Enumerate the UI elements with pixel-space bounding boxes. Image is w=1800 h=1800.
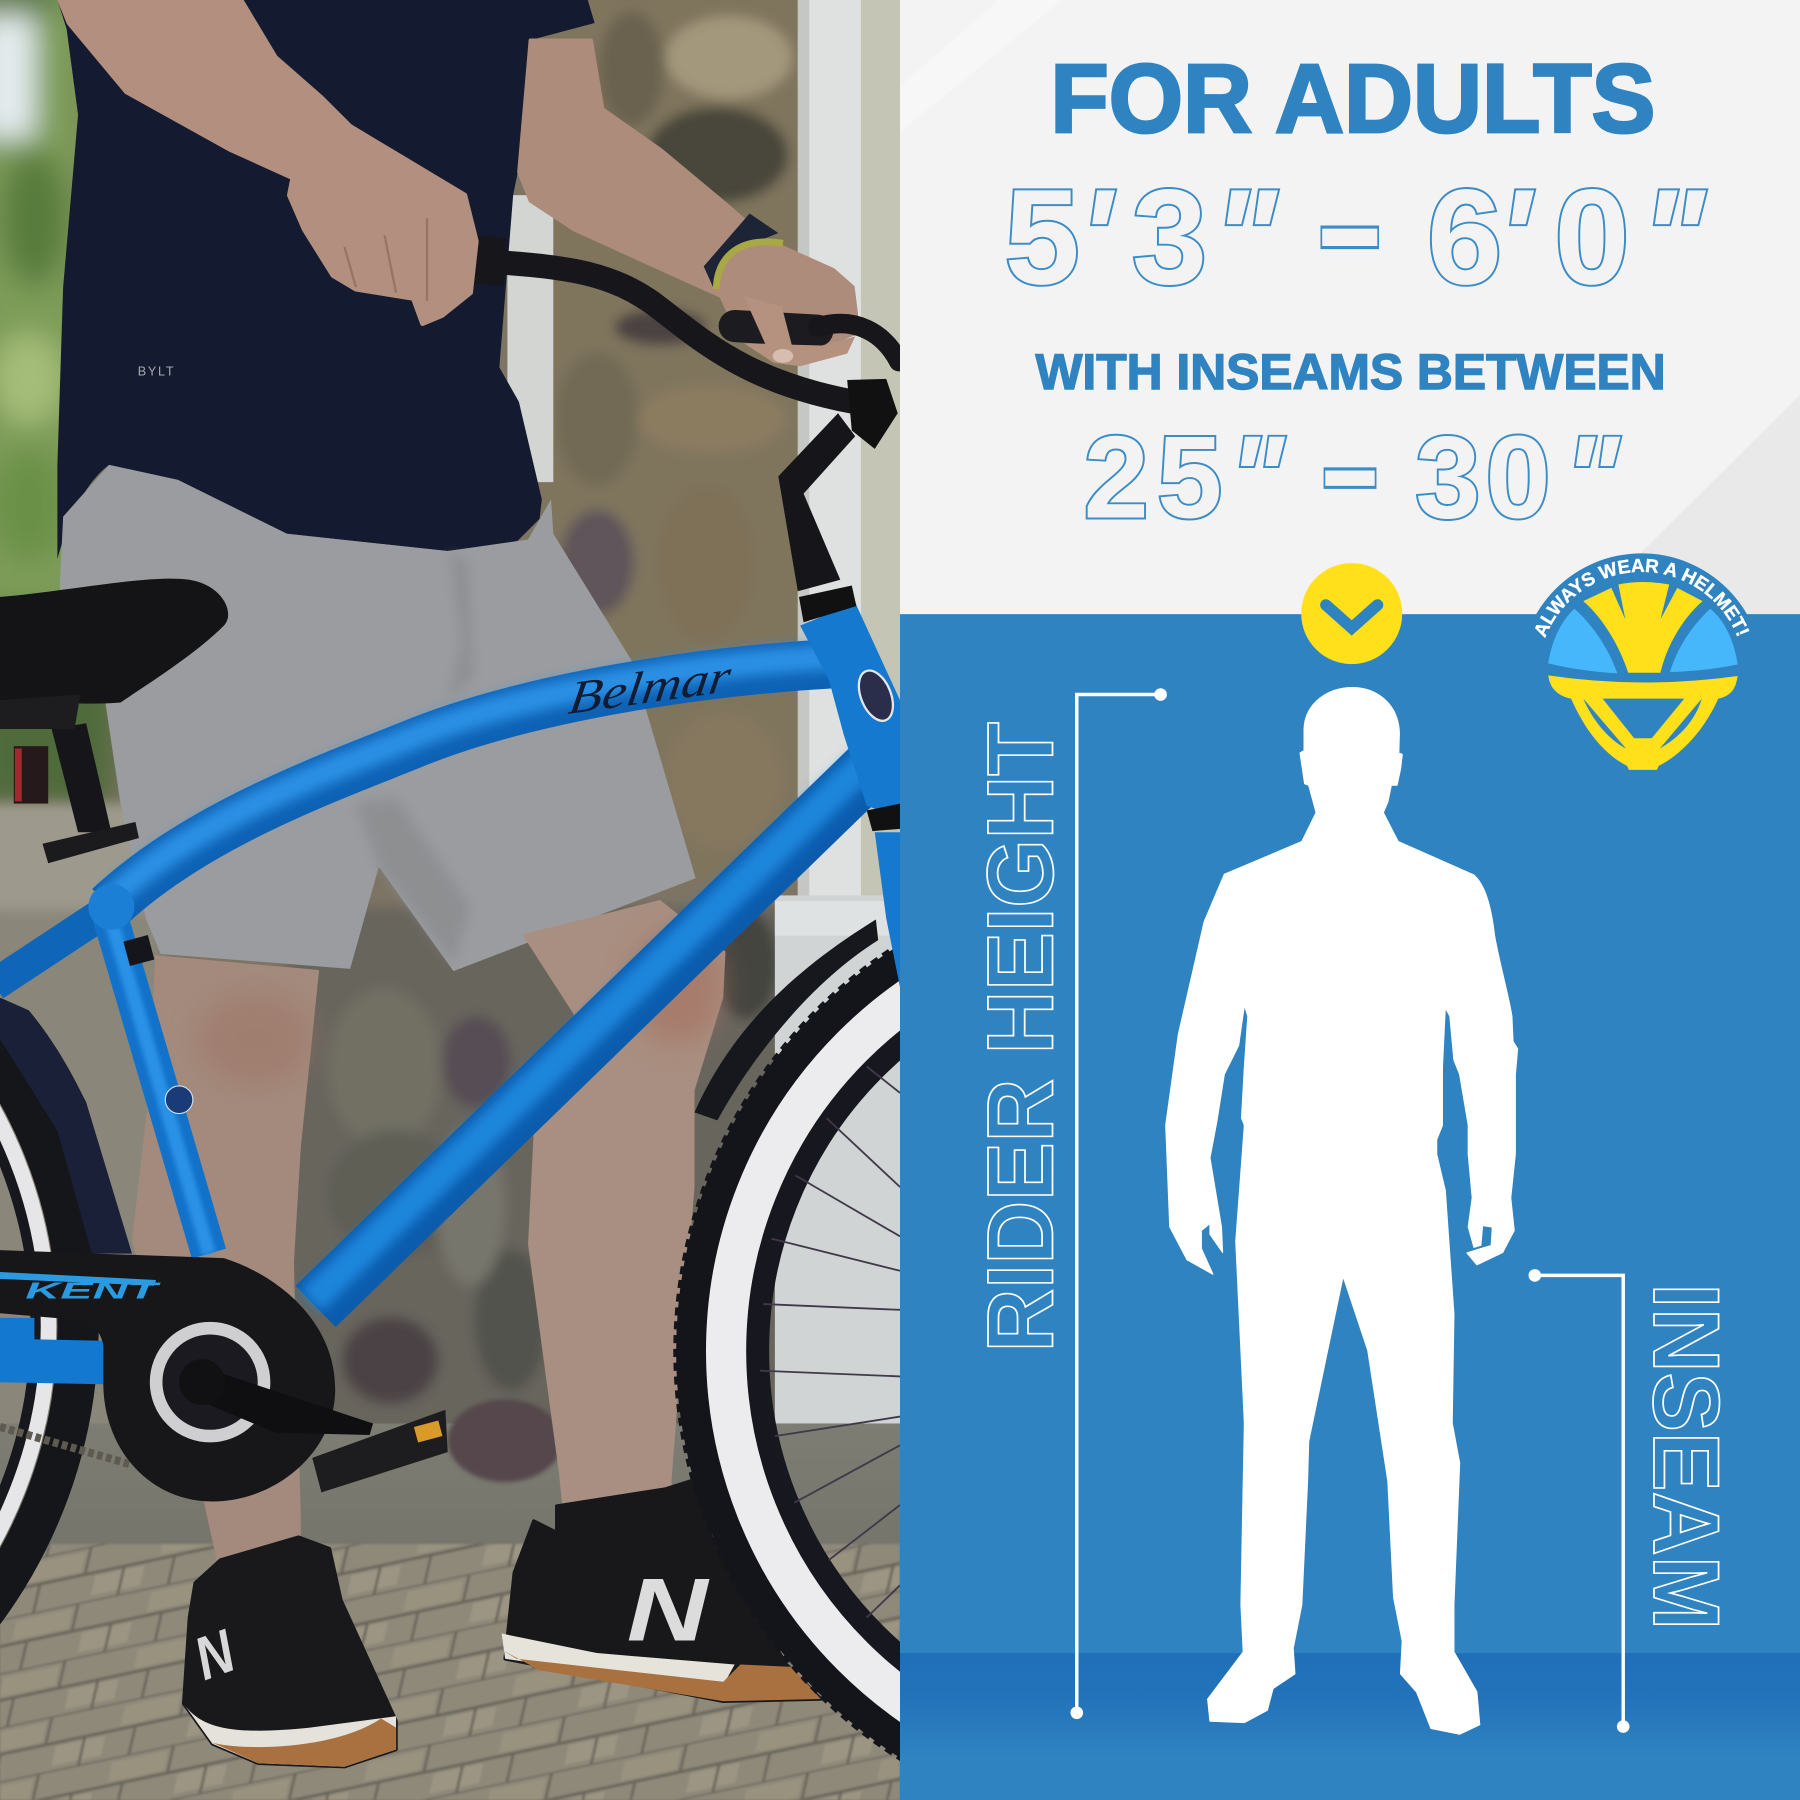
person silhouette — [1166, 688, 1518, 1734]
photo: handlebar — [473, 259, 899, 404]
photo: blue bike frame — [0, 585, 900, 1363]
photo: far sneaker — [502, 1480, 821, 1701]
height range outlined — [1004, 107, 1706, 337]
inseam range outlined: 0 — [1485, 412, 1551, 543]
photo: near sneaker: N — [185, 1616, 245, 1693]
helmet: curved slogan: ALWAYS WEAR A HELMET! — [1535, 558, 1750, 638]
photo: near arm and fist — [60, 0, 476, 324]
height range outlined: ' — [1079, 161, 1115, 313]
frame: head tube — [800, 603, 900, 817]
photo: handlebar stem — [778, 413, 855, 591]
photo: stem clamp — [847, 379, 898, 449]
photo: far sneaker: N — [627, 1560, 710, 1660]
height range outlined: " — [1212, 161, 1278, 313]
photo: near leg — [132, 955, 319, 1567]
photo: shirt logo: BYLT — [138, 364, 175, 378]
inseam range outlined — [1084, 360, 1621, 568]
photo background: foliage, stone wall and door — [0, 0, 900, 1800]
inseam range outlined: 5 — [1157, 412, 1222, 543]
height range outlined: 3 — [1132, 161, 1207, 313]
inseam range outlined: " — [1228, 412, 1285, 543]
photo: chain guard with brand — [0, 1250, 335, 1502]
height range outlined: 0 — [1554, 161, 1630, 313]
frame: top headset ring — [799, 585, 856, 622]
photo: shorts shading — [356, 553, 473, 964]
photo: knee shading near leg — [197, 993, 312, 1085]
label: rider height: RIDER HEIGHT — [968, 722, 1073, 1352]
photo: chain — [0, 1427, 132, 1465]
frame: down tube — [311, 758, 875, 1306]
frame: model name script: Belmar — [566, 650, 735, 725]
heading: for adults: FOR ADULTS — [1050, 44, 1655, 153]
frame: seat tube — [106, 901, 209, 1254]
photo: front wheel — [677, 871, 1637, 1800]
inseam range outlined: " — [1564, 412, 1621, 543]
photo: fingers over far grip — [744, 296, 855, 366]
label: inseam: INSEAM — [1634, 1283, 1739, 1630]
panel: light top background — [900, 0, 1800, 620]
icon: yellow chevron badge — [1301, 563, 1402, 664]
height range outlined: – — [1318, 107, 1382, 337]
icon: helmet badge — [1535, 553, 1750, 770]
height range outlined: 5 — [1004, 161, 1080, 313]
photo: wheel spokes — [760, 1066, 900, 1617]
photo: near sneaker — [184, 1537, 396, 1767]
panel: blue bottom background — [900, 614, 1800, 1800]
frame: seat stay — [0, 909, 109, 985]
height range outlined: " — [1640, 161, 1706, 313]
photo: wristwatch and bracelet — [704, 214, 783, 289]
photo: crank and pedal — [179, 1359, 448, 1492]
inseam range outlined: 3 — [1415, 412, 1481, 543]
frame: seal decal — [165, 1086, 193, 1114]
frame: headset ring — [867, 804, 900, 831]
photo: chain guard with brand: KENT — [25, 1277, 161, 1303]
photo: rear wheel and fender — [0, 846, 132, 1800]
frame: head badge — [852, 666, 900, 726]
photo: grey shorts — [60, 465, 696, 971]
height range outlined: ' — [1498, 161, 1534, 313]
inseam range outlined: 2 — [1084, 412, 1149, 543]
frame: top tube — [109, 657, 836, 907]
photo: knee shading far leg — [631, 930, 723, 1045]
frame: chain stay — [0, 1360, 109, 1363]
photo: far leg — [522, 900, 726, 1508]
subheading: with inseams between: WITH INSEAMS BETWEEN — [1035, 343, 1666, 400]
photo: navy t-shirt — [57, 0, 595, 559]
photo: far arm and hand behind handlebar — [519, 40, 856, 344]
inseam range outlined: – — [1321, 360, 1379, 568]
helmet: shell and harness — [1548, 582, 1738, 770]
frame: upper stay — [0, 1319, 34, 1339]
frame: small sticker — [123, 935, 154, 966]
height range outlined: 6 — [1427, 161, 1502, 313]
frame: seat cluster lug — [88, 884, 134, 930]
marker: rider height bracket — [1070, 688, 1167, 1719]
photo: saddle — [0, 579, 228, 704]
photo: front fender — [695, 920, 878, 1120]
photo: seat post and clamp — [0, 695, 139, 863]
frame: lower head tube — [875, 832, 900, 987]
marker: inseam bracket — [1529, 1269, 1630, 1733]
